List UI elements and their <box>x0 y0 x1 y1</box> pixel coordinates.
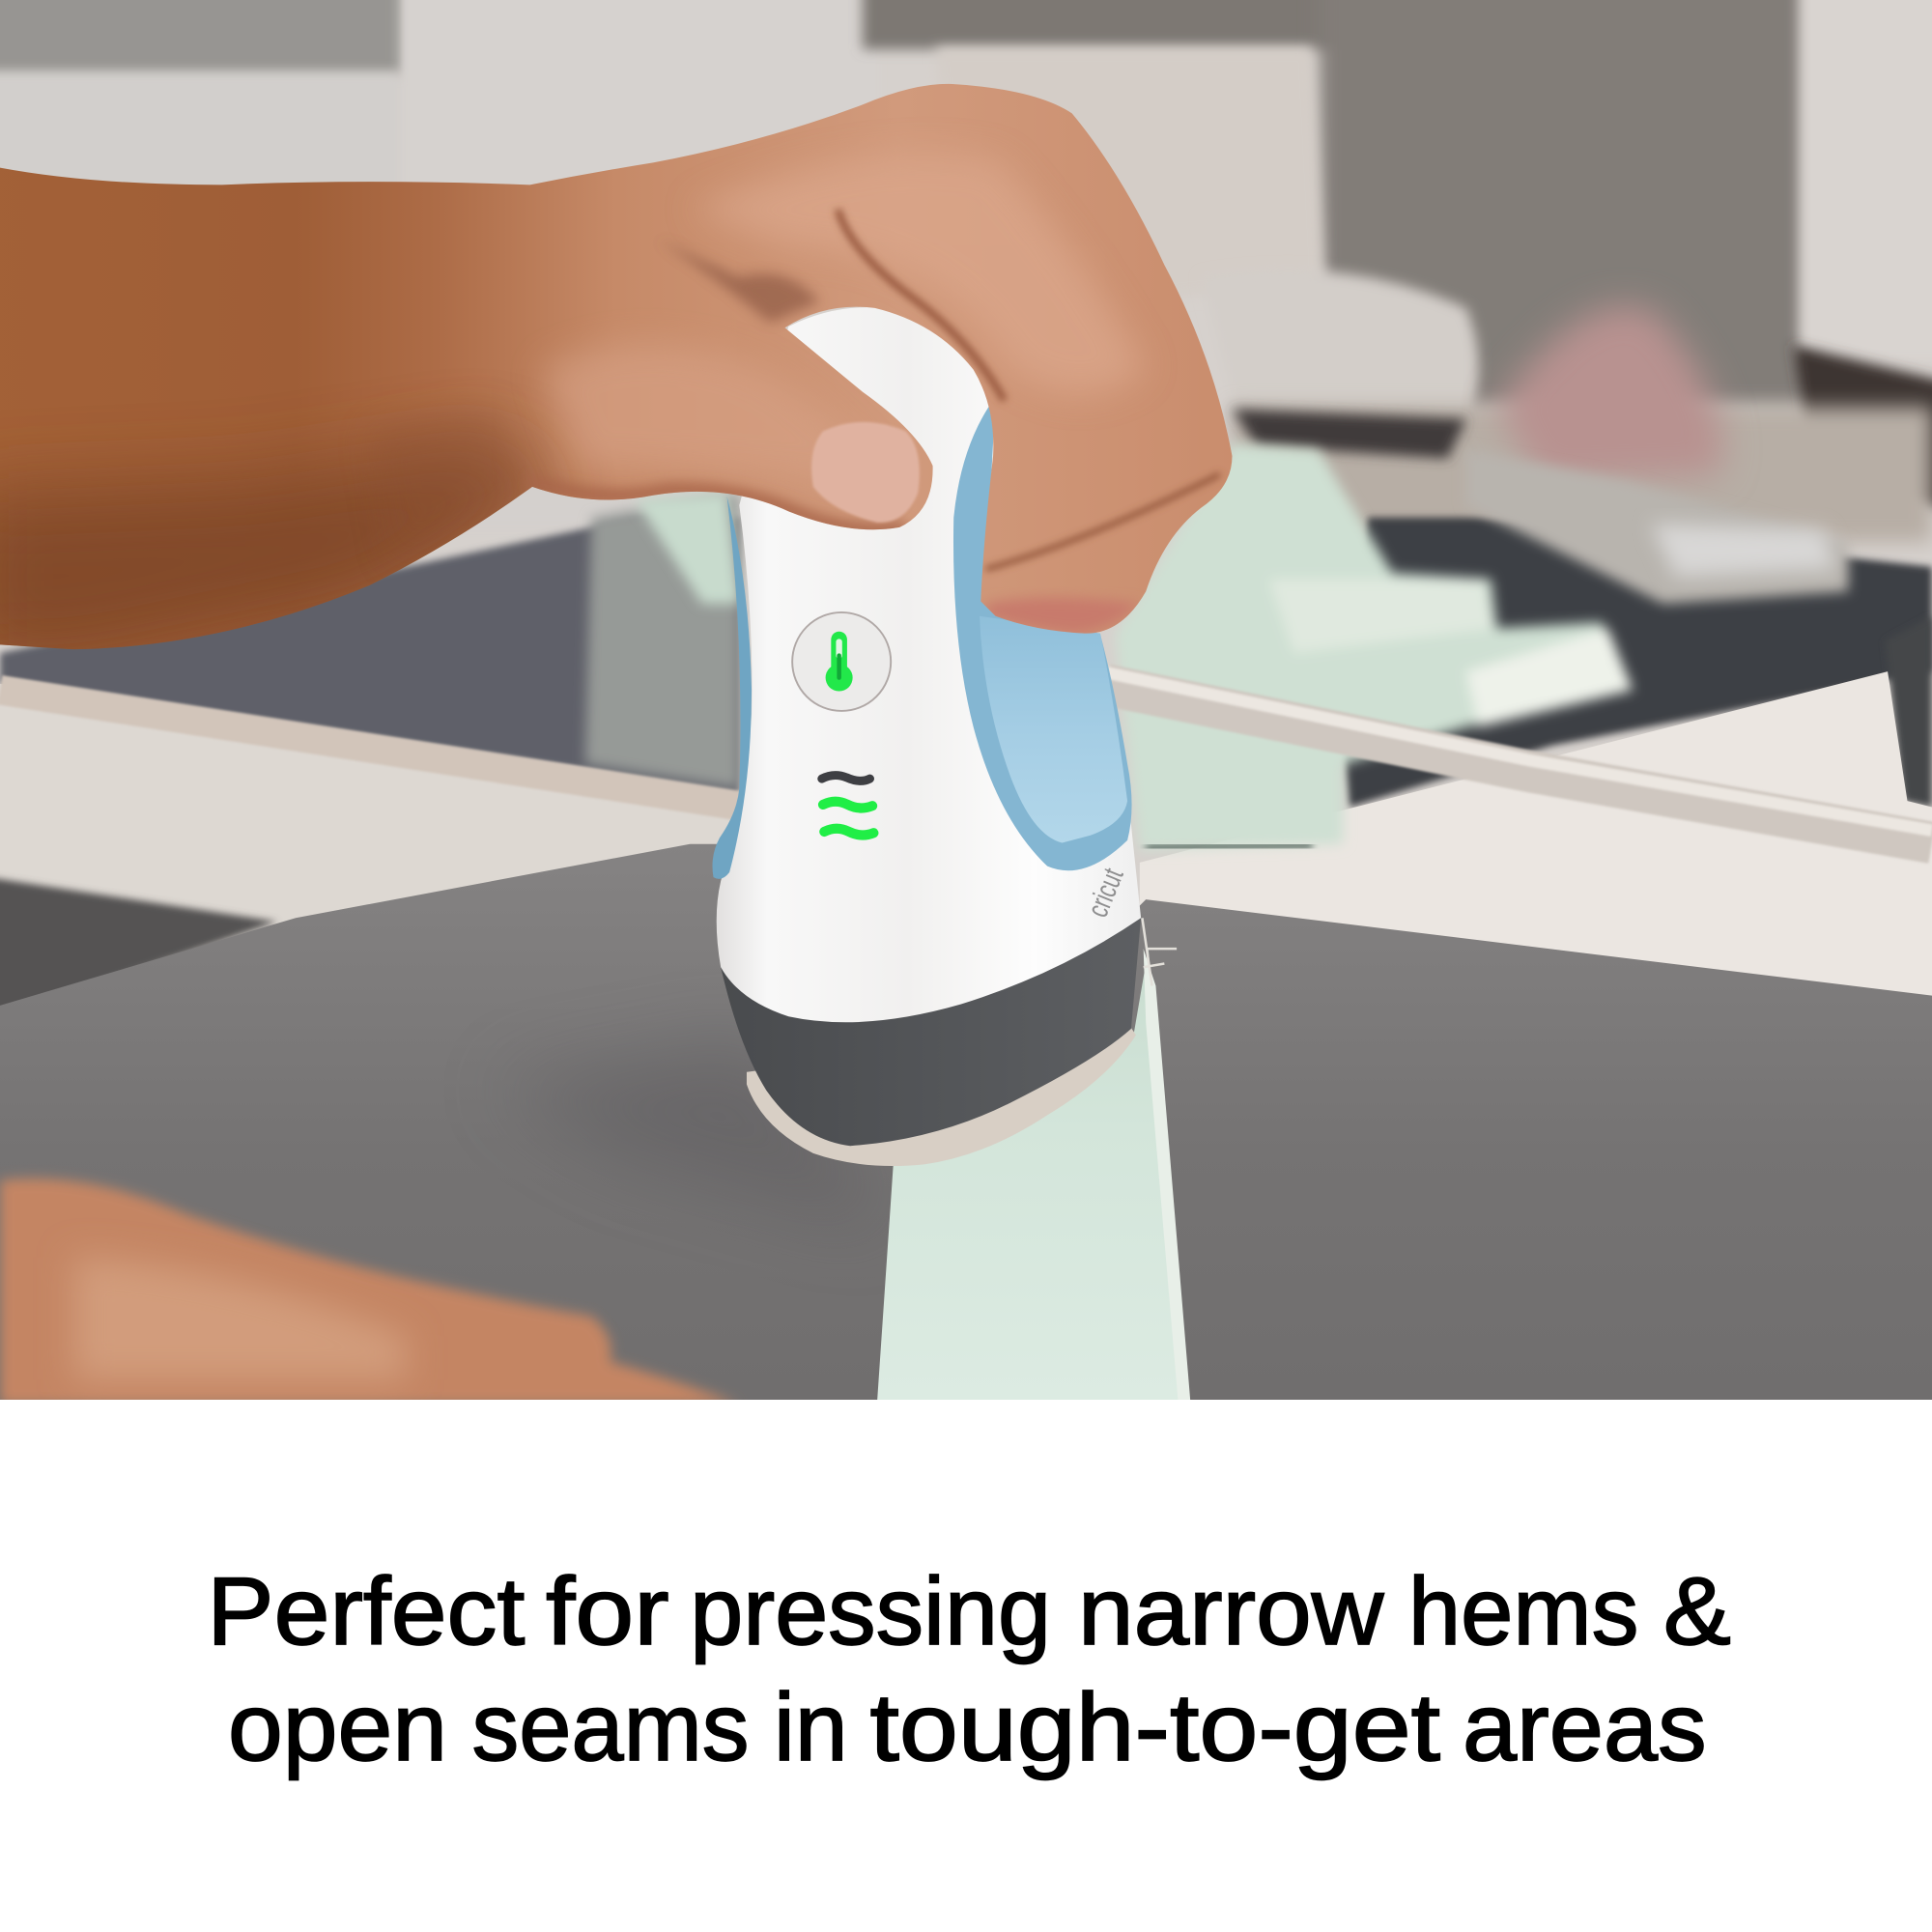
board shadow under iron <box>568 1047 835 1195</box>
caption line 1: for <box>546 1558 669 1665</box>
strip edge highlight <box>1144 949 1190 1400</box>
button disc <box>792 612 891 711</box>
caption line 2: seams <box>472 1674 750 1781</box>
mat reflection <box>585 493 739 788</box>
knuckle highlight <box>690 154 1146 394</box>
caption line 2: in <box>774 1674 848 1781</box>
ironing board <box>0 844 1932 1400</box>
caption line 1: & <box>1663 1558 1731 1665</box>
table surface left <box>0 684 2 688</box>
fingertip pink <box>985 598 1140 634</box>
mint fabric strip <box>877 949 1189 1400</box>
hand and arm <box>0 74 1257 666</box>
caption line 1: narrow <box>1078 1558 1385 1665</box>
mint fabric shadow line <box>1146 845 1312 848</box>
finger fold <box>838 210 1005 401</box>
caption line 2 <box>228 1674 1707 1781</box>
caption line 1 <box>207 1558 1731 1665</box>
table top edge left <box>0 690 739 806</box>
power cord <box>1106 685 1932 842</box>
photo: hand pressing fabric with mini iron <box>0 0 1932 1405</box>
blue handle inner <box>980 616 1127 842</box>
background wall <box>0 0 1932 906</box>
caption line 2: areas <box>1463 1674 1707 1781</box>
icon: heat level waves <box>822 776 873 836</box>
thumb highlight <box>542 345 887 493</box>
caption heading <box>207 1558 1731 1781</box>
arm lower shadow <box>0 443 554 666</box>
caption line 2: open <box>228 1674 447 1781</box>
blurred background objects <box>0 0 1932 542</box>
hand base colour <box>0 74 1257 666</box>
dark band <box>721 918 1141 1146</box>
temperature button <box>792 612 891 711</box>
lower finger crease <box>985 474 1220 569</box>
dark cutting mat left <box>0 518 739 795</box>
remote-like object <box>1466 450 1848 604</box>
silver sole plate <box>747 1023 1136 1166</box>
caption line 2: tough-to-get <box>870 1674 1440 1781</box>
palm crease shadow <box>659 241 819 323</box>
mint fabric in background <box>635 443 1633 850</box>
cord highlight <box>1106 672 1932 831</box>
thumbnail <box>811 422 920 523</box>
icon: thermometer <box>826 639 853 692</box>
table surface right <box>1140 671 1932 1023</box>
frayed threads <box>1142 918 1177 985</box>
lower-left hand highlight <box>74 1257 407 1380</box>
table lower shadow left <box>0 877 277 1023</box>
iron <box>712 307 1141 1166</box>
caption line 1: pressing <box>690 1558 1051 1665</box>
caption line 1: hems <box>1408 1558 1638 1665</box>
left blue strip <box>712 497 752 879</box>
dark mat right <box>1337 518 1932 807</box>
dark object right edge <box>1886 616 1932 807</box>
white body <box>717 307 1141 1022</box>
wrist shadow <box>370 407 529 567</box>
thumb underside shadow <box>529 480 906 530</box>
brand wordmark: cricut <box>1081 864 1130 922</box>
remote highlight <box>1651 524 1836 577</box>
blue handle rim <box>953 397 1132 870</box>
caption line 1: Perfect <box>207 1558 525 1665</box>
lower-left hand <box>0 1179 739 1405</box>
